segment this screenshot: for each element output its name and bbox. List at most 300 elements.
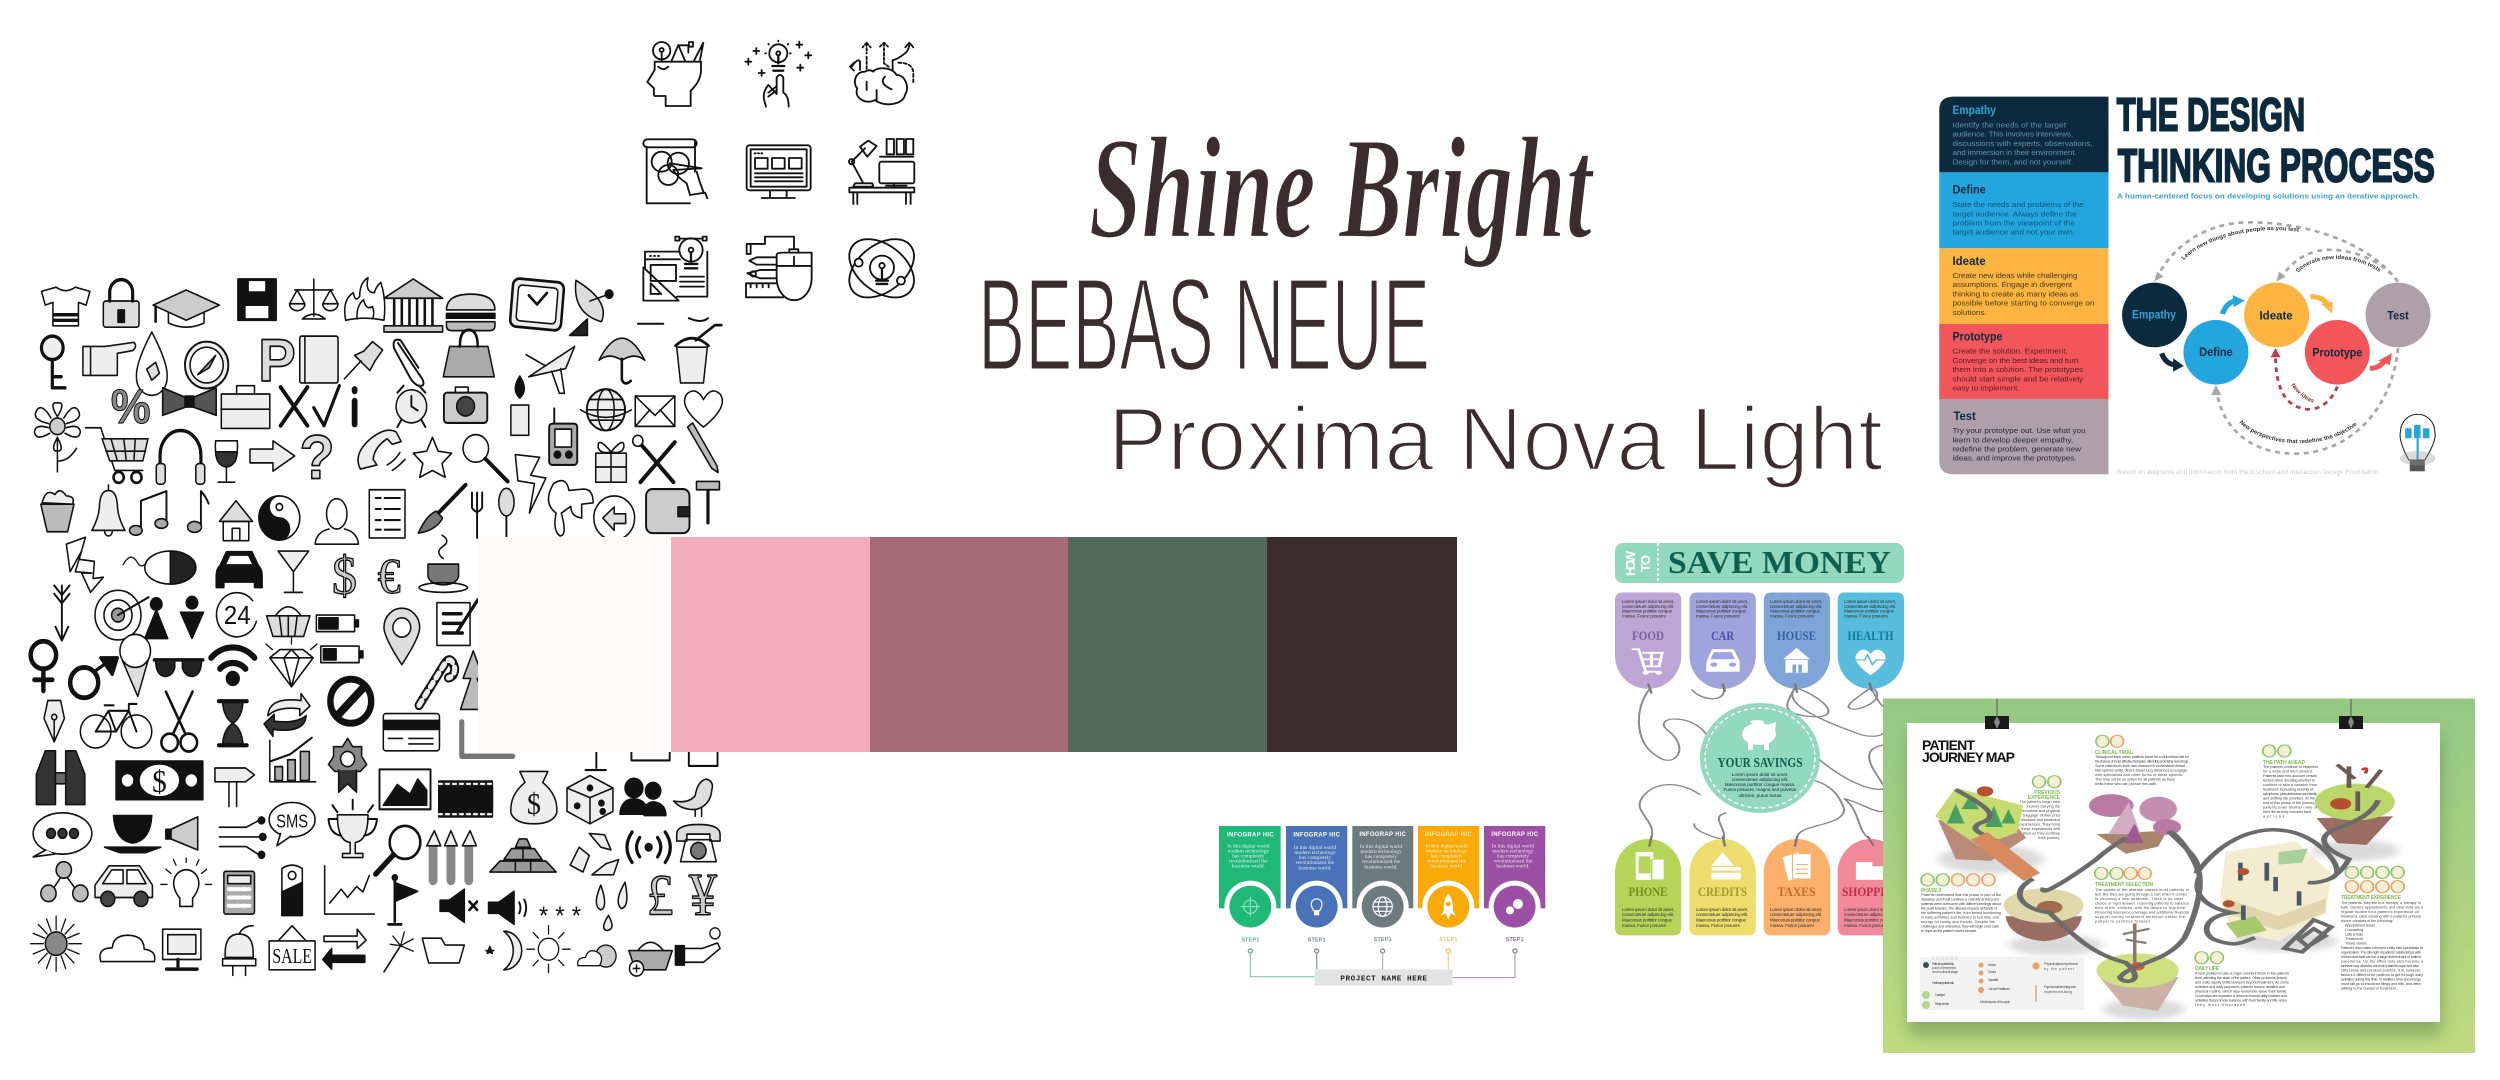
icon: umbrella — [599, 338, 645, 383]
section: clinical trial: limits these who can pursue this path. — [2095, 782, 2157, 786]
card: test: Try your prototype out. Use what you — [1952, 426, 2086, 435]
doodle icon grid — [31, 278, 722, 976]
letter i — [350, 389, 359, 424]
section: treatment selection: The values of the disease causes most patients to — [2095, 888, 2189, 892]
arc labels: Learn new things about people as you test — [2181, 226, 2300, 260]
banner — [1615, 543, 1904, 583]
icon: padlock — [103, 280, 139, 327]
patient journey map poster — [1883, 698, 2475, 1053]
island: signpost — [2097, 923, 2179, 1011]
step card: green: STEP1 — [1241, 938, 1259, 944]
step card: blue: revolutionized the — [1296, 860, 1335, 866]
letter P: P — [258, 327, 296, 394]
icon: hand with coin — [675, 928, 720, 965]
tag: car: CAR — [1711, 629, 1735, 643]
section: the path ahead: end of this phase of the journey, — [2263, 801, 2315, 805]
icon: scales — [290, 279, 338, 319]
banner: TO — [1638, 555, 1653, 572]
section: treatment experience: Patient's also make informed entity with specialists at — [2341, 946, 2424, 950]
icon: key — [41, 336, 65, 388]
icon: picture frame corner — [462, 722, 513, 756]
step card: orange: INFOGRAP HIC — [1425, 832, 1472, 838]
section: the path ahead: patients enter another route of — [2263, 806, 2318, 810]
island: pink trees — [2089, 794, 2181, 854]
arrow: ideate to prototype — [2311, 297, 2333, 313]
section: clinical trial: with specialists and other forms of these options. — [2095, 773, 2183, 777]
icon: rotary telephone — [677, 824, 720, 862]
tag: car: massa. Fusce posuere — [1696, 613, 1740, 618]
section: the path ahead: The patients continue to treatment — [2263, 765, 2319, 769]
tag: taxes: Lorem ipsum dolor sit amet, — [1770, 907, 1822, 912]
step card: orange: modern technology — [1426, 848, 1468, 854]
project name bar — [1315, 969, 1453, 986]
step card: grey: has completely — [1365, 854, 1397, 860]
arc: learn new things — [2156, 222, 2398, 282]
tag: shopping — [1838, 839, 1904, 935]
icon: desk with lamp — [849, 139, 914, 204]
step card: blue — [1286, 826, 1347, 944]
section: treatment experience: Labs & tests — [2345, 932, 2363, 936]
section: the path ahead: options. — [2263, 814, 2287, 818]
icon: floppy disk — [238, 279, 276, 320]
your savings circle: consectetuer adipiscing elit. — [1732, 777, 1788, 782]
card: prototype — [1939, 324, 2108, 399]
icon: battery — [316, 615, 358, 632]
section: treatment selection: choice or right answer, requiring patients to balance — [2095, 902, 2189, 906]
mark: X — [281, 387, 307, 426]
card: empathy: discussions with experts, observations, — [1952, 139, 2093, 148]
your savings circle: Lorem ipsum dolor sit amet, — [1732, 772, 1788, 777]
tag: car: Lorem ipsum dolor sit amet, — [1696, 599, 1748, 604]
icon: scissors — [161, 692, 197, 751]
card: empathy — [1939, 97, 2108, 172]
icon: martini — [278, 551, 309, 592]
section: previous experience: PREVIOUS — [2034, 790, 2061, 796]
legend box: point of treatment — [1932, 966, 1956, 970]
icon: globe — [580, 389, 631, 431]
icon: idea bulb and finger — [745, 41, 811, 107]
arrow: define to ideate — [2222, 295, 2245, 314]
poster green backdrop — [1883, 698, 2475, 1053]
left column: five stage cards — [1939, 97, 2108, 474]
section: previous experience: The patient's begin their — [2020, 800, 2061, 804]
section: treatment experience: nurses and staff can be a large determinant of patient — [2341, 955, 2422, 959]
colour palette — [478, 537, 1457, 752]
icon: business people — [620, 778, 666, 816]
icon: arrow down — [54, 585, 70, 641]
icon: SMS bubble — [269, 802, 315, 846]
stage circle: test: Test — [2387, 309, 2409, 322]
icon: flower — [34, 403, 80, 472]
icon: creative head — [647, 42, 703, 106]
section: treatment experience: adding to the burden of treatment. — [2341, 986, 2397, 990]
icon: bell — [92, 485, 125, 536]
card: prototype: Prototype — [1952, 330, 2003, 344]
swatch: pink — [671, 537, 870, 752]
section: treatment experience: Travel stories — [2345, 942, 2367, 946]
tag: health: Maecenas porttitor congue — [1844, 608, 1894, 613]
your savings circle: YOUR SAVINGS — [1718, 755, 1802, 770]
icon: pencil — [688, 423, 718, 473]
step card: green: modern technology — [1228, 848, 1269, 854]
font sample: Proxima Nova Light: Proxima Nova Light — [1108, 390, 1883, 490]
step card: grey: revolutionized the — [1362, 859, 1401, 865]
icon: circuit lines — [219, 817, 266, 858]
tag: shopping: SHOPPING — [1842, 885, 1902, 899]
card: define: Define — [1952, 183, 1986, 196]
section: treatment selection: to choosing a new treatment. There is no clear — [2095, 897, 2184, 901]
section: daily life: lives, affecting the state of the patient. Other problems (travel) — [2195, 976, 2288, 980]
icon: headphones — [156, 431, 205, 484]
step card: green: INFOGRAP HIC — [1227, 833, 1274, 839]
tag: credits: CREDITS — [1698, 885, 1747, 899]
infographic: five steps — [1219, 826, 1545, 986]
tag: food — [1615, 592, 1681, 689]
icon: no entry sign — [330, 679, 371, 723]
step card: blue: business world. — [1298, 865, 1332, 871]
card: ideate: solutions. — [1952, 308, 1987, 317]
icon: envelope — [635, 396, 675, 426]
step card: grey — [1352, 826, 1413, 943]
percent sign: % — [111, 379, 151, 433]
step card: grey: modern technology — [1360, 849, 1402, 855]
dashed feedback arcs — [2156, 222, 2398, 454]
tag: taxes: consectetuer adipiscing elit. — [1770, 912, 1822, 917]
icon: piggy bank — [1742, 720, 1776, 750]
icon: spiky sun — [31, 916, 82, 971]
section: clinical trial: the chance of more effective therapies, attending promising new drugs. — [2095, 760, 2189, 764]
icon: magnifying glass — [376, 826, 420, 874]
icon: sign post — [215, 768, 254, 807]
tag: shopping: Lorem ipsum dolor sit amet, — [1844, 907, 1896, 912]
icon: burger — [446, 294, 495, 331]
poster title: JOURNEY MAP — [1922, 749, 2015, 765]
icon: black cup — [105, 816, 161, 853]
icon: picture — [379, 769, 431, 809]
card: test: ideas, and improve the prototypes. — [1952, 454, 2077, 463]
icon: satellite dish — [570, 280, 613, 335]
section: phase II: energy for family and friends. Despite the — [1921, 920, 1995, 924]
card: define — [1939, 172, 2108, 248]
your savings circle: Fusce posuere, magna sed pulvinar — [1723, 787, 1797, 792]
section: previous experience: them as they continue — [2023, 832, 2060, 836]
step card: purple: revolutionized the — [1494, 858, 1533, 864]
section: the path ahead: factors when deciding whether to — [2263, 778, 2315, 782]
panel subtitle: A human-centered focus on developing solutions using an iterative approach. — [2117, 192, 2420, 200]
swatch: forest green — [1068, 537, 1267, 752]
step card: orange: business world. — [1430, 864, 1463, 870]
icon: shopping cart — [85, 428, 148, 483]
stage circle: empathy: Empathy — [2132, 308, 2176, 321]
legend box: Caregiver — [1935, 993, 1946, 997]
tag: phone: massa. Fusce posuere — [1622, 923, 1666, 928]
section: treatment experience: factors it different for patients to get through daily — [2341, 973, 2423, 977]
icon: heart — [685, 391, 722, 427]
card: prototype: Converge on the best ideas and turn — [1952, 356, 2079, 365]
tag: food: massa. Fusce posuere — [1622, 613, 1666, 618]
section: daily life: activities that promote balance with their family and life when — [2195, 998, 2287, 1002]
section: phase II: Patients understand that this phase is part of the — [1921, 893, 2001, 897]
tag: phone — [1615, 839, 1681, 935]
tag: health — [1838, 592, 1904, 689]
section: clinical trial: Throughout each week, patients travel for a clinical trial visit for — [2095, 755, 2190, 759]
icon: speaker — [489, 891, 526, 924]
section: previous experience: diseases and treatment — [2021, 818, 2061, 822]
icon: money bag — [511, 771, 557, 824]
icon: square clock — [510, 278, 564, 331]
icon: target — [95, 590, 149, 640]
icon: pointing hand — [83, 342, 136, 375]
section: treatment experience: organization. The strength of patients' relationships with — [2341, 950, 2421, 954]
legend box: Mental space of thoughts — [1980, 1000, 2010, 1004]
orange tube — [1979, 836, 2032, 877]
section: treatment experience: regular routine for a patient's experience on — [2341, 910, 2419, 914]
tag: credits: Lorem ipsum dolor sit amet, — [1696, 907, 1748, 912]
card: define: problem from the viewpoint of the — [1952, 219, 2076, 228]
section: the path ahead: their life as they consider their — [2263, 810, 2312, 814]
icon: user silhouette — [315, 499, 358, 544]
swatch: off white — [478, 537, 671, 752]
icon: hammer — [696, 481, 719, 523]
icon: atom with bulb — [838, 227, 925, 309]
icon: calculator — [224, 871, 254, 914]
section: treatment experience: stressor only decision and help patients cope and also — [2341, 964, 2419, 968]
icon: candle — [511, 376, 529, 435]
icon: coffee cup — [419, 535, 468, 592]
icon: refresh arrows — [264, 694, 310, 736]
card: prototype: them into a solution. The prototypes — [1952, 365, 2083, 374]
card: empathy: audience. This involves interviews, — [1952, 130, 2073, 139]
section: treatment selection: feel like they are going through a cart when it comes — [2095, 892, 2187, 896]
section: daily life: DAILY LIFE — [2195, 966, 2220, 972]
section: treatment experience — [2341, 895, 2424, 990]
stage circle: prototype: Prototype — [2312, 346, 2362, 360]
icon: cloud — [100, 935, 155, 962]
section: the path ahead: symptoms, personal travel and family — [2263, 792, 2317, 796]
legend box — [1920, 956, 2084, 1010]
section: the path ahead: THE PATH AHEAD — [2263, 760, 2305, 766]
tag: taxes: Maecenas porttitor congue — [1770, 918, 1820, 922]
tag: house: Lorem ipsum dolor sit amet, — [1770, 599, 1822, 604]
icon: camera — [444, 387, 487, 423]
section: previous experience: 'baggage' of their prior — [2022, 814, 2061, 818]
icon: drop — [136, 332, 167, 395]
icon: fire — [345, 278, 385, 320]
font sample: Shine Bright: Shine Bright — [1089, 107, 1595, 269]
section: phase II: patients were overcome with different feelings about — [1921, 902, 2002, 906]
icon: dice — [567, 776, 613, 824]
icon: bow tie — [163, 388, 216, 415]
step card: green: In this digital world — [1227, 843, 1270, 849]
icon: hourglass — [219, 701, 247, 745]
icon: desktop monitor — [747, 145, 811, 198]
avatar badges — [1921, 735, 2404, 964]
icon: door hanger — [282, 865, 302, 915]
icon: design window — [643, 237, 707, 301]
icon: bulb socket — [223, 926, 256, 975]
card: ideate: Ideate — [1952, 254, 1986, 268]
card: ideate — [1939, 248, 2108, 324]
tag: shopping: consectetuer adipiscing elit. — [1844, 912, 1896, 917]
step card: purple: business world. — [1496, 864, 1530, 870]
step card: purple: modern technology — [1492, 848, 1534, 854]
icon: double note — [129, 491, 168, 535]
icon: male symbol — [70, 658, 117, 698]
strings between tags — [1639, 686, 1886, 840]
source note: Based on diagrams and information from the d.school and Interaction Design Foundation. — [2117, 469, 2381, 476]
card: ideate: assumptions. Engage in divergent — [1952, 280, 2073, 289]
icon: popcorn basket — [41, 491, 74, 532]
icon: trophy — [328, 800, 377, 858]
icon: medal — [328, 738, 367, 792]
stage circle: test — [2366, 283, 2431, 347]
icon: female symbol — [31, 641, 56, 691]
banner: HOW — [1623, 550, 1638, 576]
step card: purple: In this digital world — [1492, 843, 1534, 849]
legend box: Nurse — [1988, 963, 1996, 967]
icon: checklist — [369, 490, 405, 538]
swatch: dusty rose — [870, 537, 1068, 752]
stars: *** — [539, 902, 581, 931]
tag: car: Maecenas porttitor congue — [1696, 608, 1746, 613]
icon: graduation cap — [153, 290, 219, 327]
tag: car — [1690, 592, 1756, 689]
section: treatment selection: patient to continue forward. — [2095, 920, 2151, 924]
icon: speech bubble — [33, 813, 92, 857]
tag: house: consectetuer adipiscing elit. — [1770, 604, 1822, 609]
legend box: Patient - the patient's entry — [1932, 962, 1954, 966]
section: phase II: to hope as the patient moves forward. — [1921, 929, 1977, 933]
section: previous experience: journey carrying the — [2026, 804, 2060, 808]
arrow: empathy to define — [2162, 353, 2184, 372]
step card: orange: STEP1 — [1439, 937, 1457, 943]
section: treatment experience: activities during this time. In addition, time and energy — [2341, 978, 2421, 982]
panel title — [2117, 89, 2435, 192]
yen sign: ¥ — [689, 861, 718, 928]
icon: woman and man signs — [145, 597, 203, 639]
card: ideate: thinking to create as many ideas as — [1952, 290, 2079, 298]
icon: briefcase — [221, 386, 270, 428]
tag: credits: massa. Fusce posuere — [1696, 923, 1740, 928]
section: treatment experience: still pursue and previous practice. It is, however, — [2341, 968, 2421, 972]
tag: phone: Lorem ipsum dolor sit amet, — [1622, 907, 1674, 912]
step card: orange: revolutionized the — [1427, 858, 1467, 864]
tag: food: FOOD — [1632, 629, 1664, 643]
legend box: Healthcare professionals — [1932, 981, 1954, 985]
tag: credits: consectetuer adipiscing elit. — [1696, 912, 1748, 917]
card: empathy: Empathy — [1952, 103, 1996, 117]
tag: health: HEALTH — [1848, 629, 1894, 643]
sign: SALE: SALE — [272, 945, 312, 968]
icon: banknote: $ — [152, 764, 167, 799]
icon: ice cream — [120, 634, 151, 696]
icon: sparkler — [384, 932, 413, 972]
project name bar: PROJECT NAME HERE — [1340, 976, 1427, 984]
section: treatment experience: must still go to insurance filings and bills, and often — [2341, 982, 2421, 986]
stage circle: ideate — [2244, 283, 2309, 347]
section: previous experience: EXPERIENCE — [2028, 795, 2061, 801]
icon: water drops — [596, 882, 627, 931]
euro sign: € — [378, 549, 401, 604]
arc labels: New ideas — [2291, 383, 2314, 402]
tag: health: massa. Fusce posuere — [1844, 613, 1888, 618]
arrow: prototype to test — [2370, 353, 2392, 368]
poster sheet — [1907, 723, 2440, 1022]
icon: airplane — [526, 346, 575, 393]
arc labels: New perspectives that redefine the objective — [2240, 420, 2356, 444]
icon: folder — [422, 938, 464, 963]
stage circle: define — [2183, 320, 2248, 385]
icon: basket with plus — [629, 942, 672, 976]
icon: credit card — [383, 714, 439, 751]
icon: magnifier — [463, 435, 508, 481]
tag: car: consectetuer adipiscing elit. — [1696, 604, 1748, 609]
icon: molecule — [41, 862, 88, 902]
arc labels: Generate new ideas from tests — [2296, 254, 2380, 272]
legend box: by the patient — [2044, 967, 2074, 971]
icon: puzzle piece — [548, 481, 593, 536]
icon: mobile device — [549, 408, 577, 465]
section: previous experience: emotions and physical — [2022, 809, 2060, 813]
legend box: LEGEND — [1932, 956, 1958, 962]
icon: SMS bubble: SMS — [276, 811, 308, 831]
card: empathy: Identify the needs of the target — [1952, 121, 2067, 129]
island: desert — [2004, 888, 2084, 941]
island: clinic building — [2220, 841, 2331, 941]
icon: signal waves — [627, 832, 670, 862]
icon: 24 hours: 24 — [224, 601, 251, 630]
card: define: target audience and not your own. — [1952, 228, 2075, 237]
section: treatment experience: Treatment — [2345, 937, 2364, 941]
section: the path ahead: and shifting life priorities. At the — [2263, 796, 2315, 800]
your savings circle — [1700, 703, 1820, 813]
section: treatment experience: The patients, they live in a 'therapy' a 'therapy' in — [2341, 901, 2421, 905]
tag: house: massa. Fusce posuere — [1770, 613, 1814, 618]
card: test: learn to develop deeper empathy, — [1952, 436, 2073, 444]
icon: exchange arrows — [323, 929, 366, 969]
section: daily life: and costs rapidly shifts between beyond treatment. As some — [2195, 980, 2289, 984]
arc: new ideas — [2276, 350, 2337, 409]
arc: new perspectives — [2216, 348, 2398, 454]
tag: food: consectetuer adipiscing elit. — [1622, 604, 1674, 609]
icon: line graph — [325, 866, 374, 914]
tag: house — [1764, 592, 1830, 689]
icon: outline sun — [527, 926, 570, 973]
dollar sign: $ — [332, 547, 357, 606]
section: treatment selection: support during treatment selection obtain the — [2095, 915, 2185, 919]
section: clinical trial: Some patients do their own research to understand clinical — [2095, 764, 2185, 768]
section: daily life: A new problem is also a major constant factor in the patients — [2195, 972, 2289, 976]
icon: basket — [267, 607, 310, 636]
stage circle: prototype — [2305, 320, 2370, 385]
step card: orange: has completely — [1431, 853, 1463, 859]
section: daily life: Good days are impacted a return to normal daily routines and — [2195, 994, 2287, 998]
legend box: Physical objects experienced — [2044, 962, 2078, 966]
icon: fountain pen — [44, 701, 64, 742]
icon: film strip — [439, 781, 492, 817]
icon: net bag — [443, 330, 494, 377]
card: define: target audience. Always define the — [1952, 210, 2077, 218]
section: treatment experience: Counseling — [2345, 928, 2363, 932]
section: the path ahead — [2263, 760, 2319, 818]
icon: light bulb — [161, 858, 212, 906]
icon: candy cane — [419, 660, 455, 705]
sign: SALE — [269, 926, 315, 970]
panel title: THE DESIGN — [2117, 89, 2305, 141]
legend box: Family member — [1935, 1002, 1950, 1006]
illustrated islands and road — [1921, 735, 2404, 1020]
section: the path ahead: Patients take into account certain — [2263, 774, 2317, 778]
